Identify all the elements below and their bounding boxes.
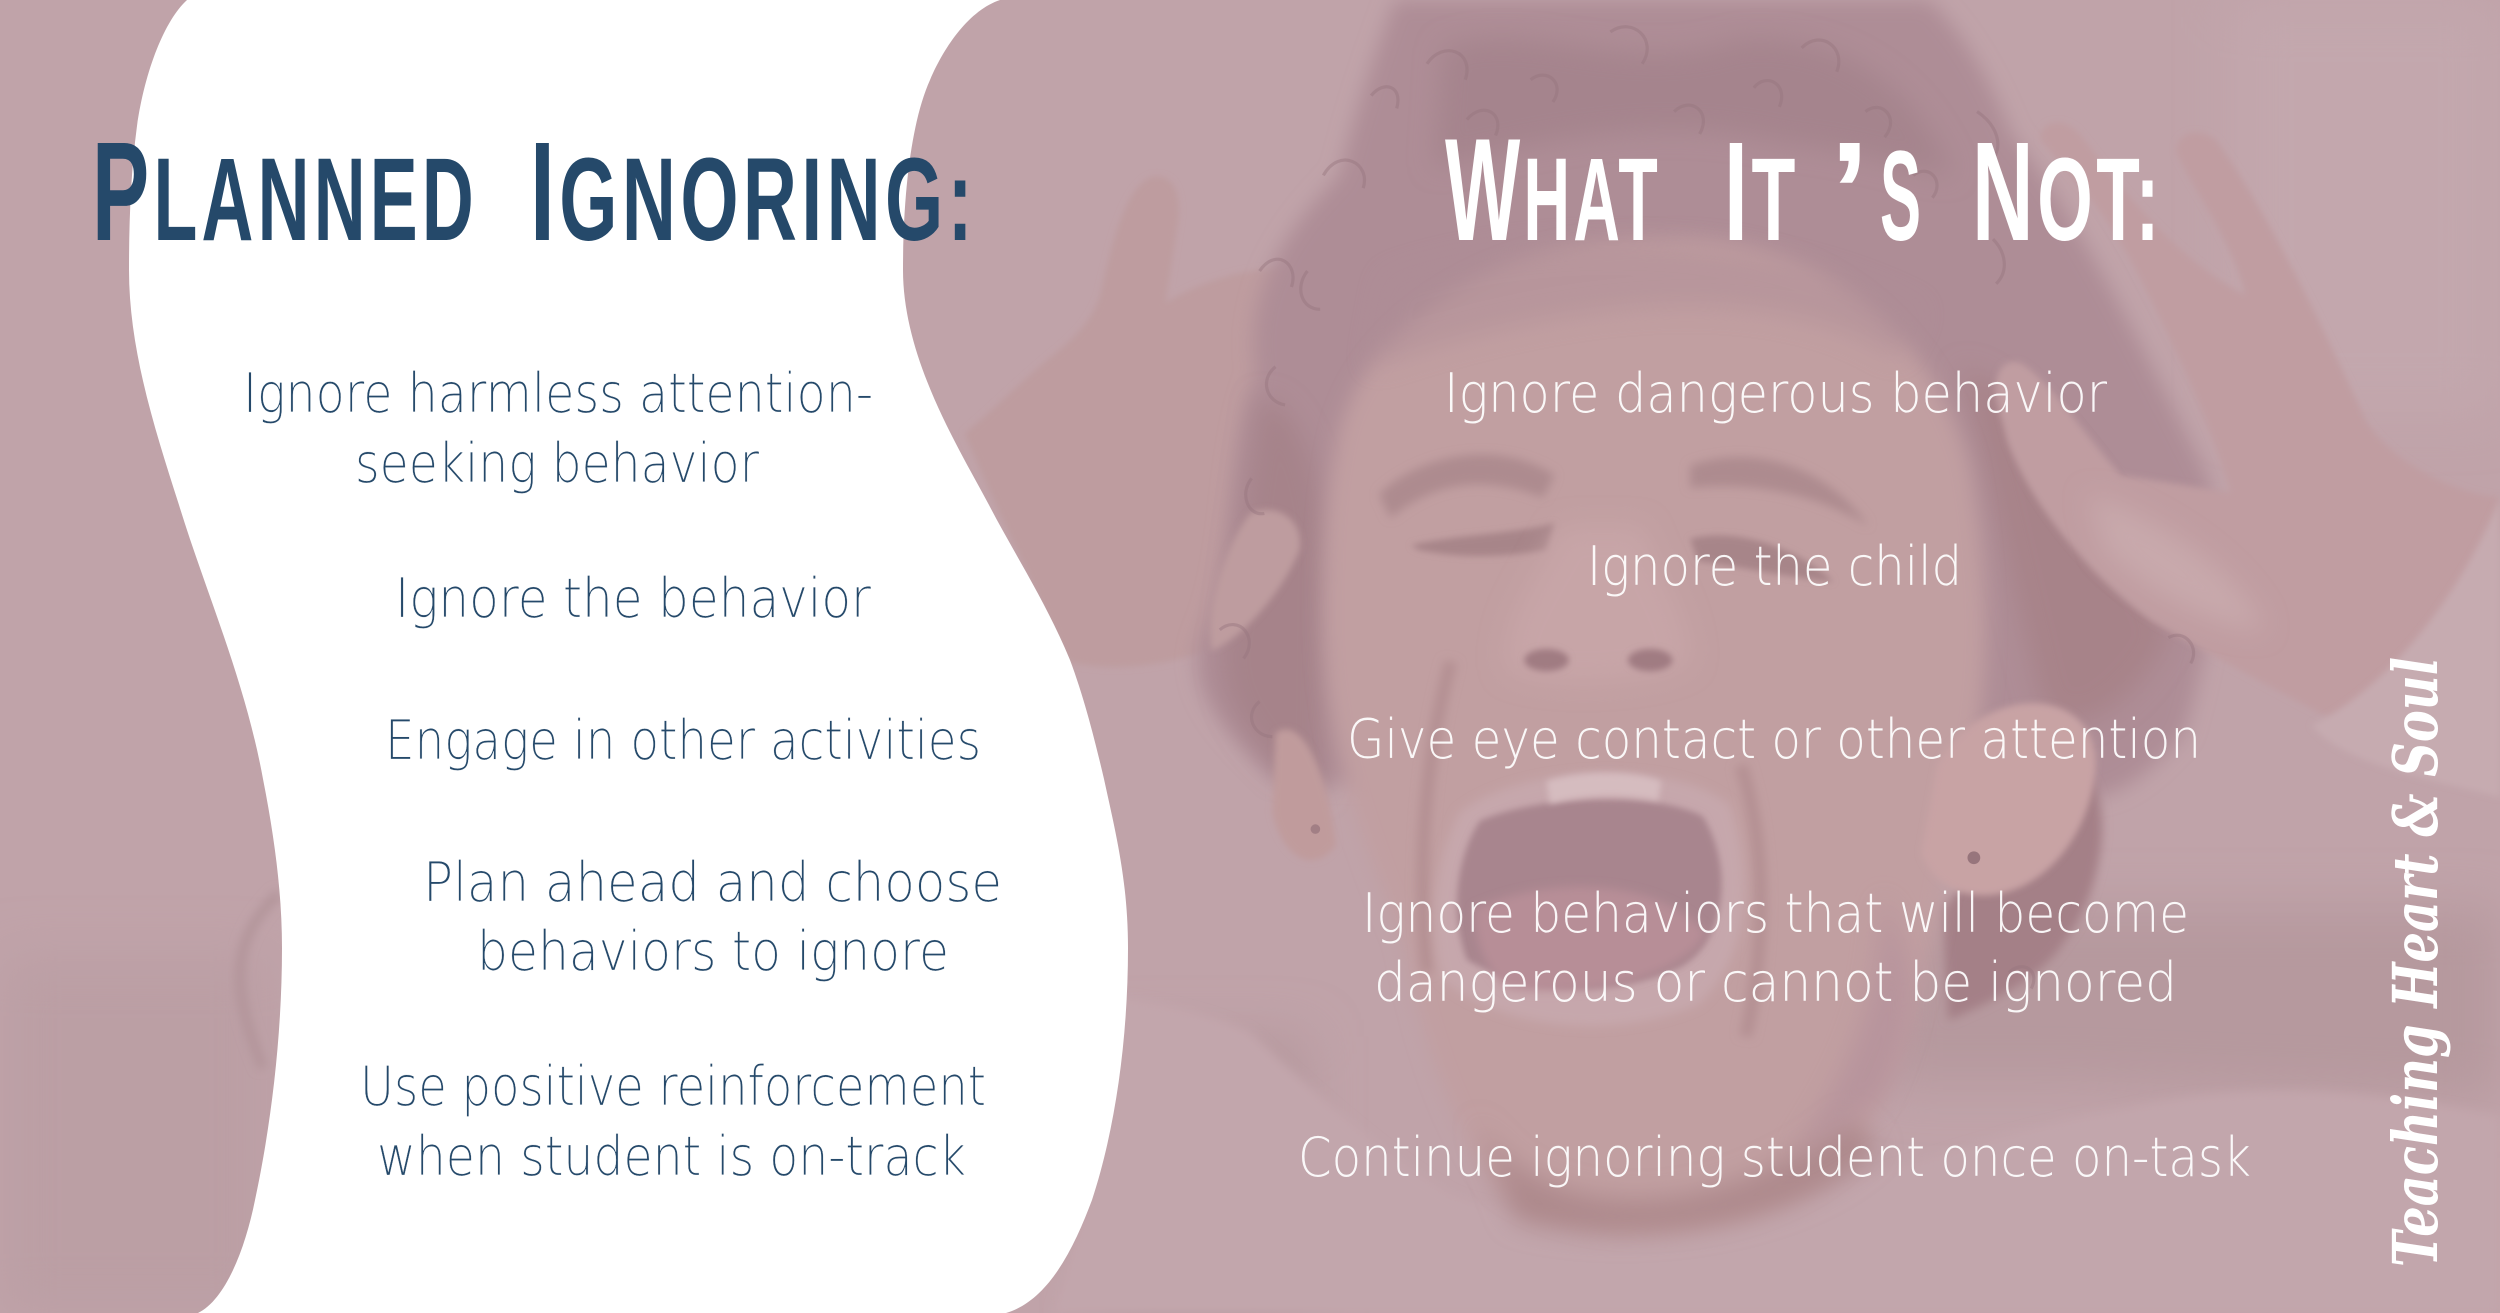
forehead hairline bbox=[1371, 244, 1921, 367]
item: plan ahead: behaviors to ignore bbox=[477, 920, 949, 983]
white wavy panel bbox=[129, 0, 1128, 1313]
item: ignore dangerous behaviour: Ignore dangerous behavior bbox=[1444, 362, 2108, 425]
item: ignore the child: Ignore the child bbox=[1587, 535, 1962, 598]
face bbox=[1323, 239, 1985, 1231]
heading: What It's Not: IT bbox=[1724, 112, 1799, 270]
neck and jaw shadow bbox=[1475, 1116, 1878, 1233]
closed eyes bbox=[1411, 523, 1834, 582]
hair curls bbox=[1220, 27, 2194, 989]
eyebrows bbox=[1379, 455, 1869, 526]
heading: What It's Not: NOT: bbox=[1972, 112, 2163, 270]
vertical brand signature: Teaching Heart & Soul bbox=[2379, 657, 2452, 1267]
pillow contour bbox=[240, 893, 279, 1068]
item: positive reinforcement bbox=[360, 1055, 986, 1188]
item: behaviours that become dangerous: Ignore behaviors that will become bbox=[1362, 882, 2189, 945]
heading: Planned Ignoring: PLANNED bbox=[92, 112, 478, 270]
right hand bbox=[1996, 123, 2500, 733]
hand palm shading bbox=[2089, 494, 2264, 630]
right ear bbox=[1921, 703, 2096, 895]
item: behaviours that become dangerous: dangerous or cannot be ignored bbox=[1374, 951, 2177, 1014]
item: ignore harmless behaviour bbox=[243, 362, 873, 495]
heading: What It's Not bbox=[1445, 108, 2163, 271]
text list: what planned ignoring is bbox=[243, 362, 1002, 1188]
left hand bbox=[965, 176, 1339, 667]
item: plan ahead bbox=[423, 851, 1002, 983]
shirt bbox=[1052, 996, 2500, 1313]
heading: What It's Not: WHAT bbox=[1445, 108, 1661, 271]
cheek folds bbox=[1423, 662, 1761, 1036]
heading: Planned Ignoring bbox=[92, 112, 977, 270]
heading: What It's Not: ’ bbox=[1830, 112, 1869, 270]
item: plan ahead: Plan ahead and choose bbox=[423, 851, 1002, 914]
item: positive reinforcement: Use positive reinforcement bbox=[360, 1055, 986, 1118]
hair bbox=[1196, 0, 2215, 1020]
item: engage in other activities: Engage in other activities bbox=[385, 709, 981, 772]
item: positive reinforcement: when student is on-track bbox=[377, 1125, 966, 1188]
left ear bbox=[1272, 729, 1336, 860]
item: behaviours that become dangerous bbox=[1362, 882, 2189, 1014]
sleeve bbox=[2312, 497, 2500, 797]
text list: what it is not bbox=[1298, 362, 2251, 1189]
heading: What It's Not: S bbox=[1880, 125, 1921, 268]
item: eye contact: Give eye contact or other attention bbox=[1347, 708, 2201, 771]
open mouth bbox=[1435, 773, 1744, 1026]
item: ignore the behaviour: Ignore the behavior bbox=[395, 567, 872, 630]
item: continue ignoring: Continue ignoring student once on-task bbox=[1298, 1126, 2251, 1189]
item: ignore harmless behaviour: seeking behavior bbox=[355, 432, 760, 495]
heading: Planned Ignoring: IGNORING: bbox=[530, 112, 977, 270]
left hand fingers over hair bbox=[1210, 510, 1300, 651]
nose bbox=[1506, 526, 1690, 682]
item: ignore harmless behaviour: Ignore harmless attention- bbox=[243, 362, 873, 425]
